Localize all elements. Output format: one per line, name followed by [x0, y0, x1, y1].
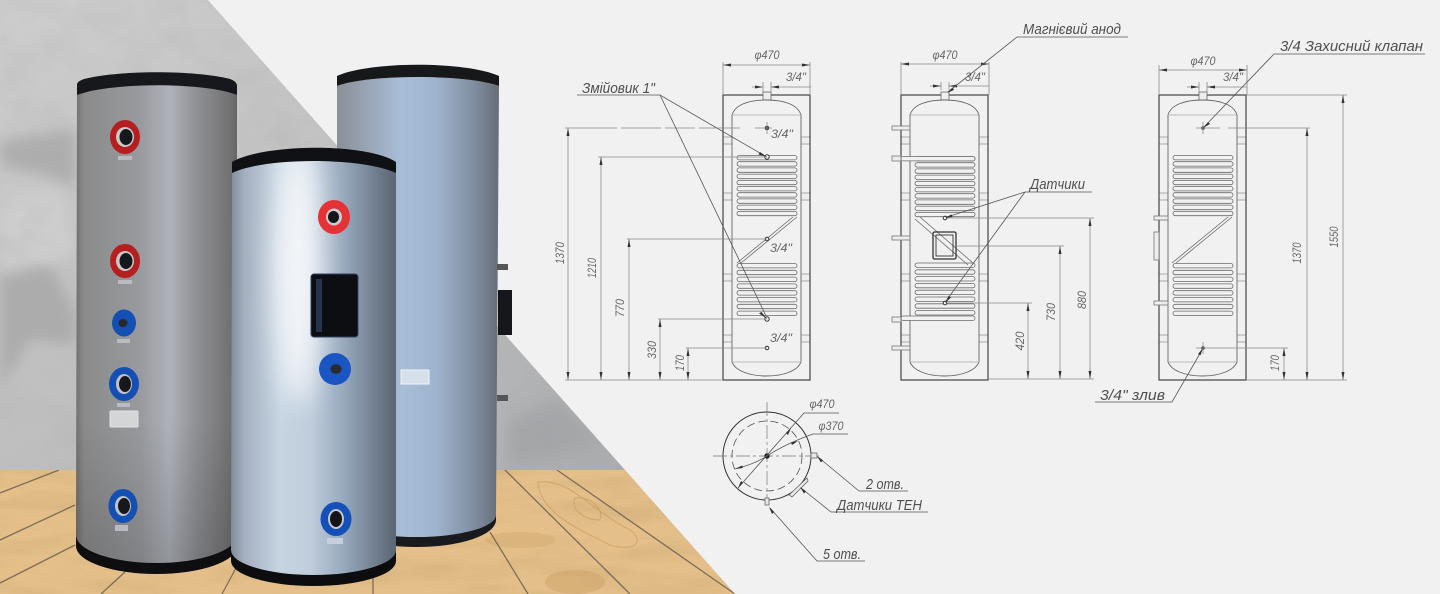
- dimension labels: 170: [1268, 355, 1282, 371]
- tank cap: [337, 65, 499, 86]
- tank cap: [232, 148, 396, 173]
- tank: left grey boiler: [76, 72, 237, 574]
- handle: [401, 370, 429, 384]
- dimension labels: φ470: [1190, 54, 1216, 68]
- drawing: coil side view: [553, 48, 811, 380]
- dimension labels: 770: [613, 299, 627, 317]
- port: blue small: [112, 310, 136, 343]
- dimension labels: 730: [1044, 303, 1058, 321]
- callout: 5 holes: 5 отв.: [823, 546, 861, 563]
- tank: front silver boiler: [231, 135, 396, 586]
- dimension labels: 3/4": [1223, 70, 1244, 84]
- dimension labels: 330: [645, 341, 659, 359]
- dimension arrows: [1159, 68, 1344, 380]
- connection points: [765, 126, 769, 350]
- drawing: valve side view: [1095, 38, 1425, 404]
- callout: safety valve: 3/4 Захисний клапан: [1280, 38, 1423, 55]
- heater flange: [933, 232, 956, 259]
- dimension arrows: [901, 62, 1092, 379]
- dimension labels: 1550: [1327, 226, 1341, 248]
- port: blue middle: [319, 353, 351, 385]
- callout: magnesium anode: Магнієвий анод: [1023, 21, 1121, 38]
- dimension lines: [565, 62, 811, 380]
- callout: safety valve: [1203, 38, 1425, 128]
- wooden table surface: [0, 470, 740, 594]
- diameter leaders: [735, 397, 848, 488]
- upper and lower coils: [901, 156, 975, 320]
- callout: coil: Змійовик 1": [582, 80, 656, 97]
- dimension labels: 3/4": [770, 241, 793, 255]
- port: red lower: [110, 244, 140, 284]
- dimension lines: [901, 62, 1094, 379]
- dimension labels: [553, 48, 807, 371]
- sensor points: [943, 216, 947, 305]
- side fittings and sensor box: [497, 264, 512, 401]
- callout: sensors: [945, 176, 1092, 303]
- callout: drain: [1095, 348, 1203, 404]
- concrete wall background: [0, 0, 634, 480]
- connection points: [1201, 126, 1205, 350]
- tank: rear right boiler: [337, 65, 512, 547]
- left pipes and flange: [1154, 216, 1168, 305]
- upper and lower coils: [1172, 156, 1233, 316]
- left pipes: [892, 126, 910, 350]
- port: blue bottom: [320, 502, 352, 544]
- dimension labels: 3/4": [786, 70, 807, 84]
- dimension labels: φ470: [754, 48, 780, 62]
- port: blue middle: [109, 367, 139, 407]
- dimension labels: 1210: [585, 258, 599, 278]
- dimension labels: 880: [1075, 291, 1089, 309]
- callout: 2 holes: [817, 456, 908, 493]
- drawing: sensors side view: [892, 21, 1128, 380]
- upper and lower coils: [737, 156, 797, 316]
- port: blue bottom: [108, 489, 138, 531]
- label plate: [110, 411, 138, 427]
- drawing: top view circle: [713, 397, 928, 563]
- callout: coil: [577, 80, 767, 319]
- callout: TEN sensors: [800, 487, 928, 514]
- dimension labels: 3/4": [771, 127, 794, 141]
- port: red: [318, 200, 350, 234]
- dimension labels: φ470: [932, 48, 958, 62]
- port: red upper: [110, 120, 140, 160]
- dimension arrows: [566, 64, 810, 380]
- diameter leaders: φ370: [818, 419, 844, 433]
- dimension lines: [1159, 65, 1347, 380]
- dimension labels: 1370: [553, 242, 567, 264]
- dimension labels: 3/4": [965, 70, 986, 84]
- dimension labels: 170: [673, 355, 687, 371]
- callout: drain: 3/4" злив: [1100, 387, 1165, 404]
- dimension labels: 1370: [1290, 242, 1304, 264]
- wood grain knots: [538, 482, 637, 547]
- callout: 5 holes: [769, 507, 865, 563]
- callout: sensors: Датчики: [1028, 176, 1086, 193]
- dimension labels: [932, 48, 1089, 350]
- dimension labels: 3/4": [770, 331, 793, 345]
- diameter leaders: φ470: [810, 397, 835, 411]
- dimension labels: 420: [1013, 331, 1027, 350]
- outlets: [765, 453, 817, 505]
- dimension labels: [1190, 54, 1341, 371]
- callout: TEN sensors: Датчики ТЕН: [835, 497, 922, 514]
- heater box: [311, 274, 358, 337]
- callout: magnesium anode: [947, 21, 1128, 93]
- callout: 2 holes: 2 отв.: [865, 476, 904, 493]
- outer and inner circles: [713, 402, 821, 505]
- tank cap: [77, 72, 237, 95]
